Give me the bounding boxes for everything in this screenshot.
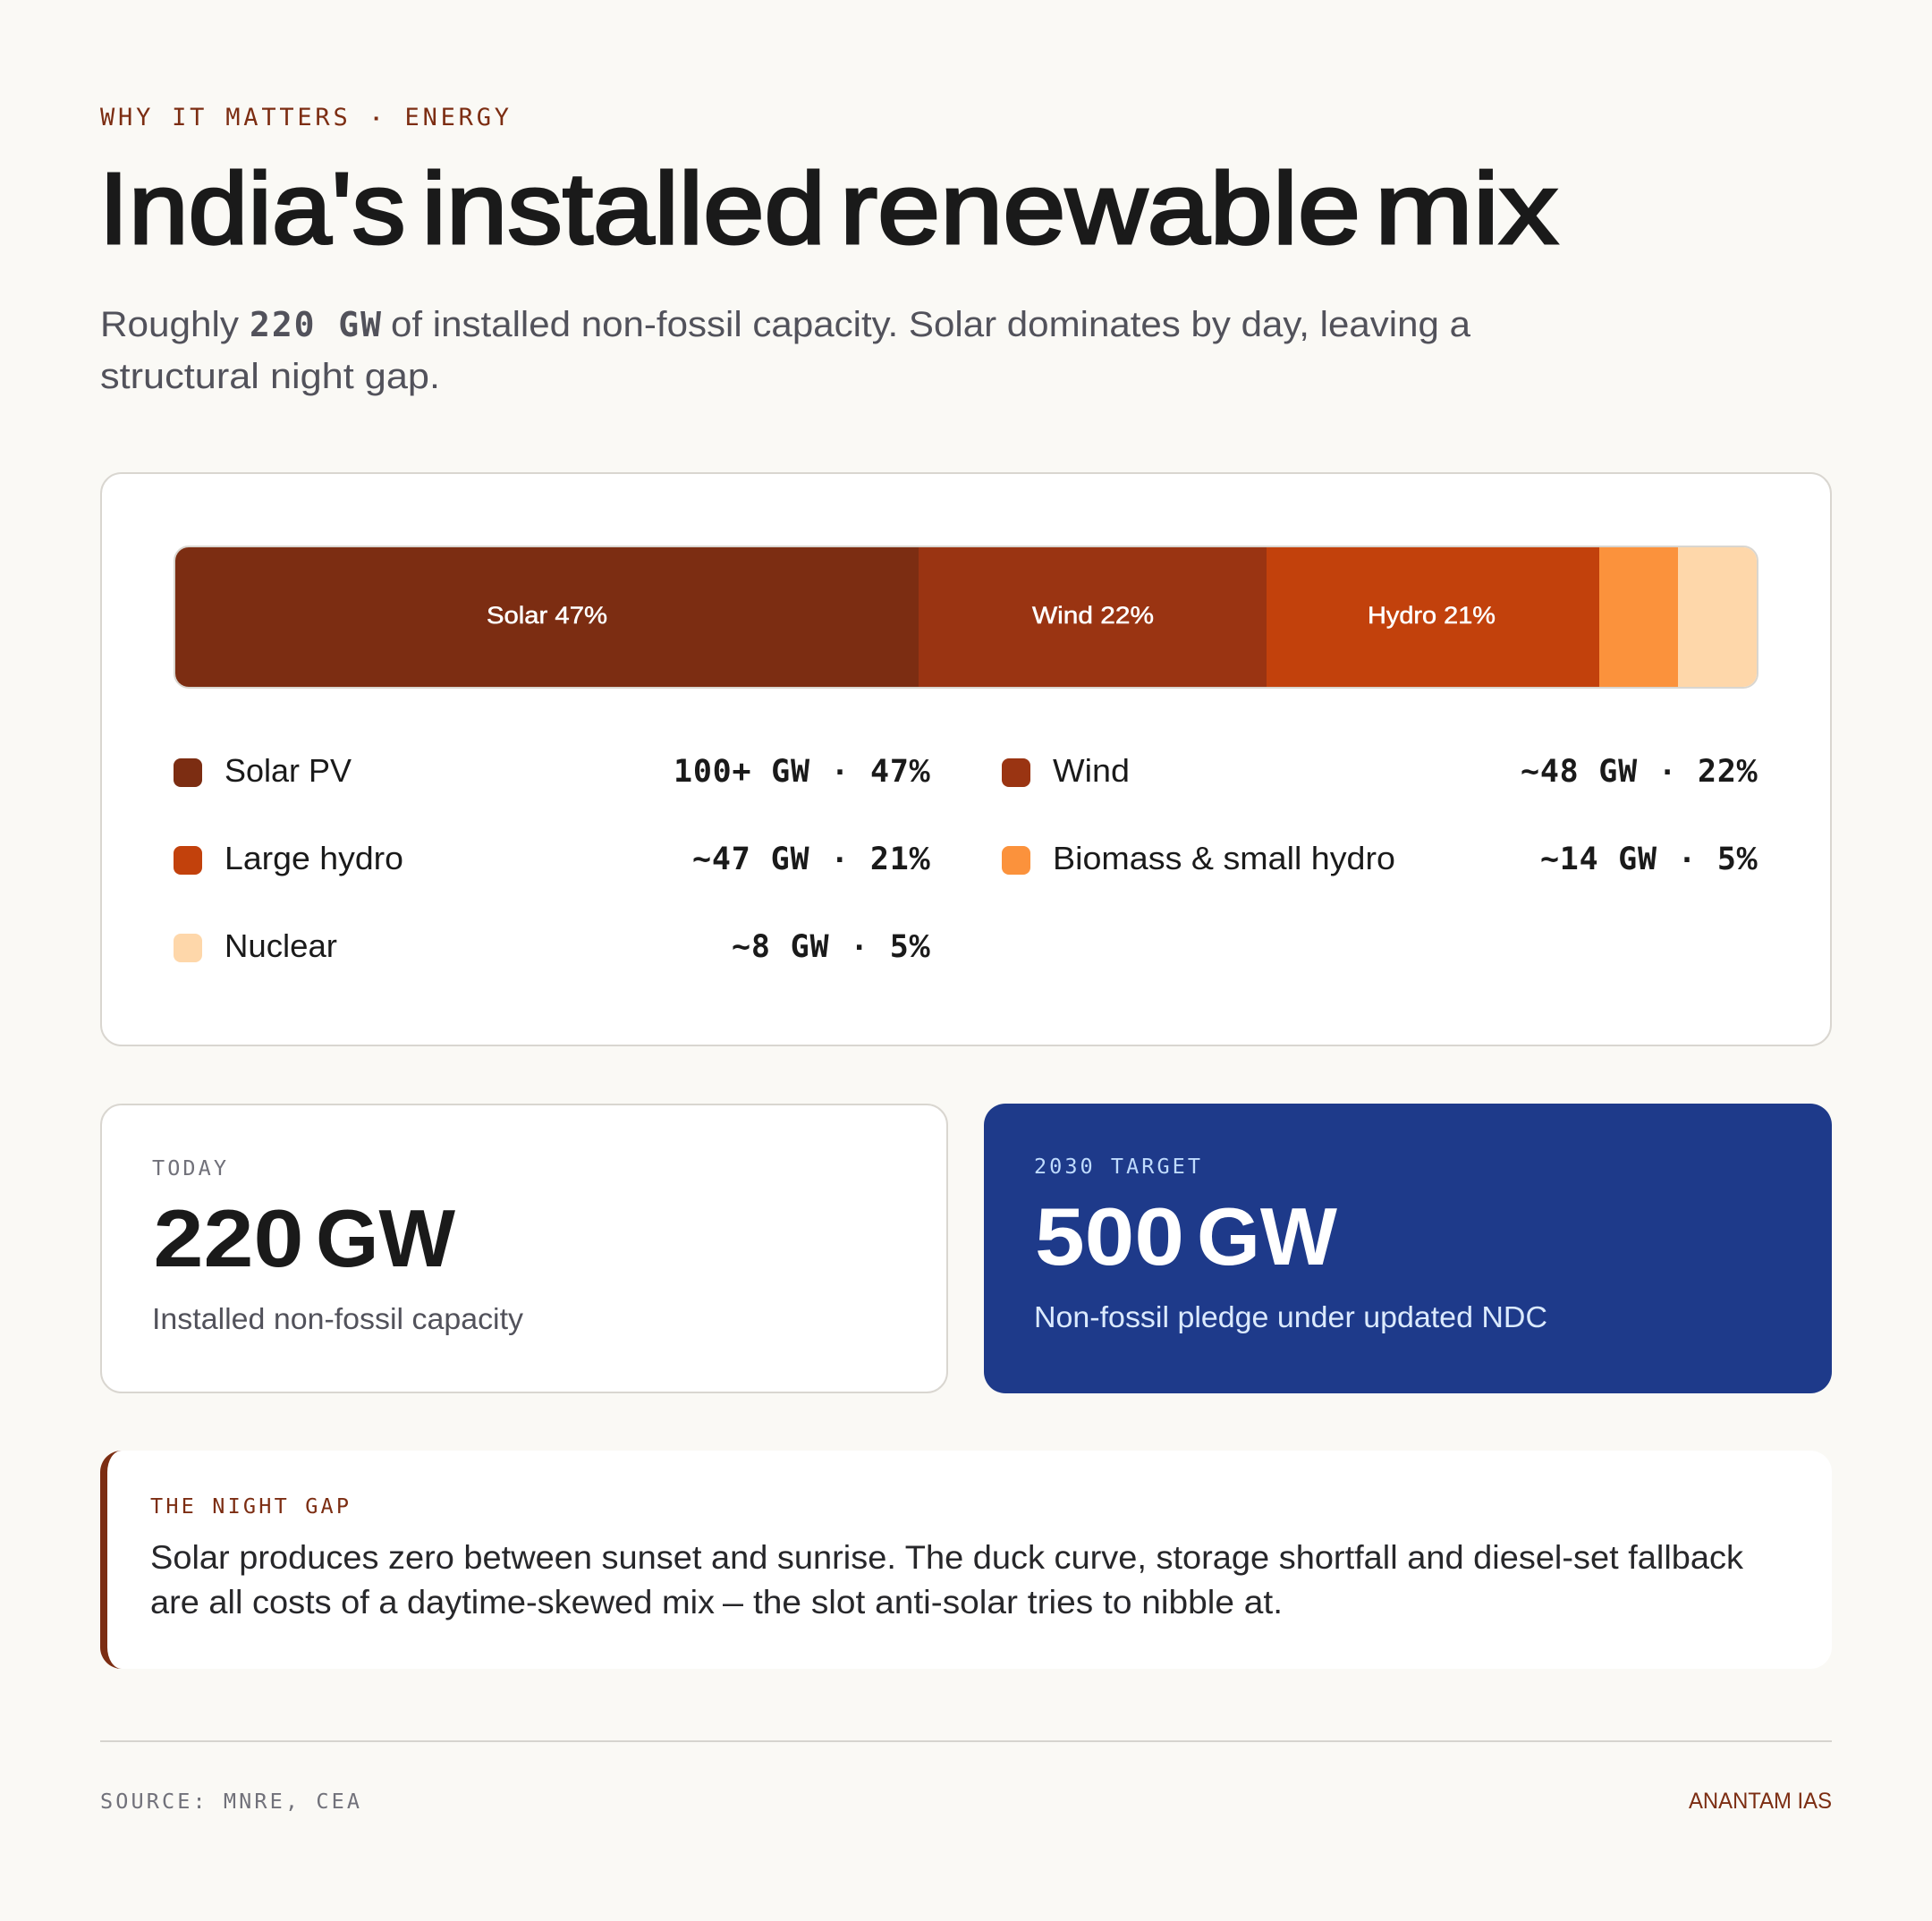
subtitle: of installed non-fossil capacity. Solar dominates by day, leaving a xyxy=(391,305,1471,344)
callout body xyxy=(150,1539,1744,1621)
legend row: biomass and small hydro: ~14 GW · 5% xyxy=(1540,842,1758,880)
source: SOURCE: MNRE, CEA xyxy=(100,1789,360,1814)
title: India's xyxy=(98,152,406,265)
stat: 220 GW: 220 xyxy=(154,1194,304,1284)
callout body: Solar produces zero between sunset and sunrise. The duck curve, storage shortfall and diesel-set fallback xyxy=(150,1539,1744,1576)
legend row: solar pv: Solar PV xyxy=(225,752,352,789)
subtitle: structural night gap. xyxy=(100,357,440,396)
legend xyxy=(174,752,1758,968)
legend row: solar pv: 100+ GW · 47% xyxy=(674,754,930,792)
stat: 220 GW: GW xyxy=(316,1194,455,1284)
legend row: biomass and small hydro: Biomass & small hydro xyxy=(1053,840,1395,876)
brand: ANANTAM IAS xyxy=(1689,1789,1832,1814)
panel: capacity mix xyxy=(101,473,1831,1045)
stat: 500 GW xyxy=(1035,1192,1337,1282)
stat: 500 GW: GW xyxy=(1197,1192,1337,1282)
bar label: solar: Solar 47% xyxy=(487,602,607,629)
panel: today stat xyxy=(101,1104,947,1392)
subtitle: Roughly xyxy=(100,305,239,344)
caption: installed capacity: Installed non-fossil capacity xyxy=(152,1302,524,1335)
title xyxy=(98,152,1558,265)
legend row: large hydro: ~47 GW · 21% xyxy=(692,842,930,880)
callout body: are all costs of a daytime-skewed mix xyxy=(150,1584,716,1621)
label: today: TODAY xyxy=(152,1155,226,1181)
legend row: wind: ~48 GW · 22% xyxy=(1521,754,1758,792)
header xyxy=(98,104,1558,396)
subtitle: 220 GW xyxy=(250,305,381,344)
stat: 500 GW: 500 xyxy=(1035,1192,1184,1282)
legend row: large hydro xyxy=(174,840,930,880)
footer xyxy=(100,1740,1832,1814)
stacked bar chart xyxy=(174,546,1758,688)
label: 2030 target: 2030 TARGET xyxy=(1034,1154,1200,1179)
callout body: the slot anti-solar tries to nibble at. xyxy=(753,1584,1283,1621)
subtitle xyxy=(100,305,1471,396)
callout heading: THE NIGHT GAP xyxy=(150,1494,349,1519)
title: installed xyxy=(422,152,826,265)
legend row: solar pv xyxy=(174,752,930,792)
callout: the night gap xyxy=(100,1451,1832,1669)
bar label: hydro: Hydro 21% xyxy=(1368,602,1496,629)
legend row: nuclear xyxy=(174,927,930,968)
legend row: nuclear: Nuclear xyxy=(225,927,337,964)
eyebrow: WHY IT MATTERS · ENERGY xyxy=(100,104,509,133)
legend row: wind: Wind xyxy=(1053,752,1130,789)
bar label: wind: Wind 22% xyxy=(1032,602,1154,629)
title: mix xyxy=(1375,152,1558,265)
stat: 220 GW xyxy=(154,1194,455,1284)
caption: pledge: Non-fossil pledge under updated NDC xyxy=(1034,1300,1547,1333)
callout body: – xyxy=(723,1584,743,1621)
legend row: nuclear: ~8 GW · 5% xyxy=(732,929,930,968)
legend row: biomass and small hydro xyxy=(1002,840,1758,880)
panel: 2030 target stat xyxy=(984,1104,1832,1393)
legend row: large hydro: Large hydro xyxy=(225,840,403,876)
legend row: wind xyxy=(1002,752,1758,792)
title: renewable xyxy=(840,152,1360,265)
